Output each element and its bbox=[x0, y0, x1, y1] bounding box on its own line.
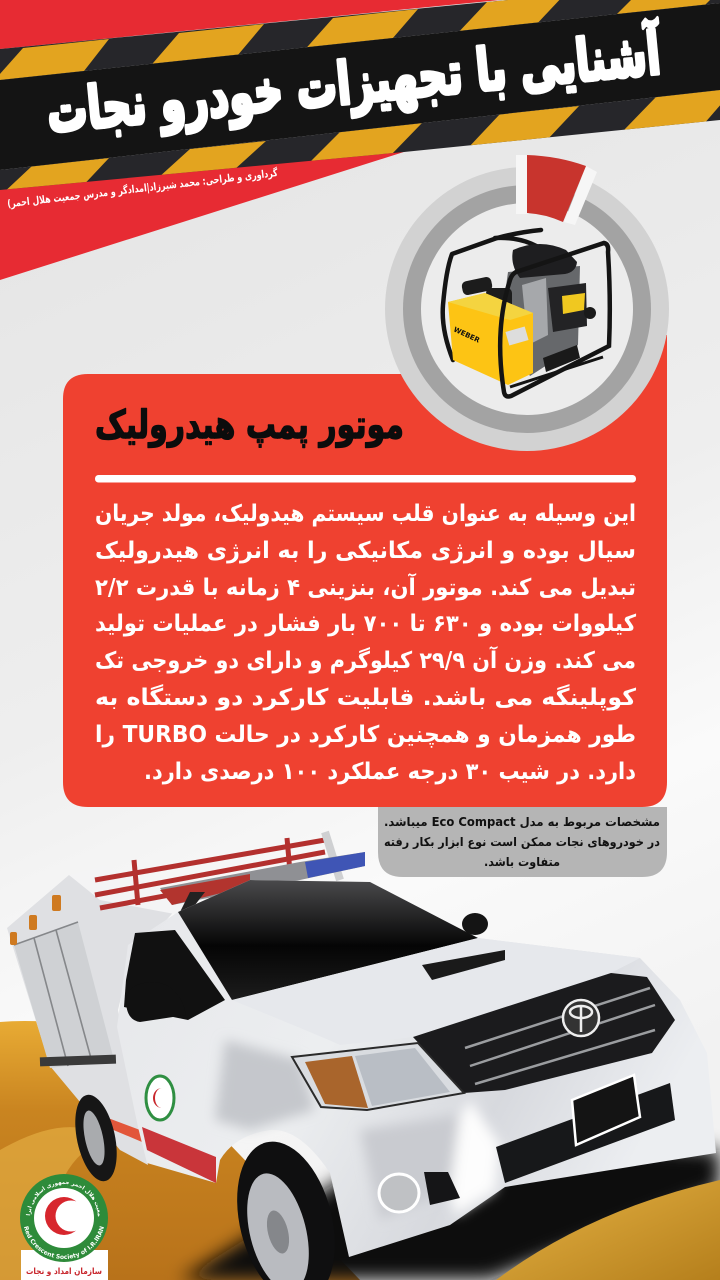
front wheel bbox=[222, 1131, 350, 1280]
logo: Red Crescent rescue organization: جمعیت هلال احمر جمهوری اسلامی ایران bbox=[26, 1182, 100, 1217]
note panel bbox=[378, 807, 667, 877]
cargo box bbox=[7, 866, 190, 1165]
fog lamp bbox=[379, 1172, 460, 1212]
windshield bbox=[178, 880, 478, 1000]
hazard stripe band: lower bbox=[0, 85, 720, 196]
front frame bbox=[500, 243, 610, 396]
black title band bbox=[0, 3, 720, 170]
mirror: passenger side bbox=[462, 913, 488, 935]
hood bbox=[232, 938, 640, 1045]
panel: hydraulic pump description bbox=[63, 335, 667, 807]
body text: کوپلینگه می باشد. قابلیت کارکرد دو دستگاه به bbox=[95, 684, 637, 711]
note panel: در خودروهای نجات ممکن است نوع ابزار بکار رفته bbox=[384, 835, 660, 850]
body text: طور همزمان و همچنین کارکرد در حالت TURBO را bbox=[95, 722, 636, 748]
toyota emblem bbox=[563, 1000, 599, 1036]
back frame bbox=[443, 230, 553, 360]
license plate bbox=[572, 1075, 640, 1145]
icon: hydraulic pump bbox=[443, 230, 610, 396]
engine bbox=[500, 266, 580, 376]
header red shapes bbox=[0, 0, 500, 280]
logo: Red Crescent rescue organization: سازمان امداد و نجات bbox=[26, 1267, 102, 1277]
truck body bbox=[117, 880, 716, 1257]
lower grille bbox=[496, 1083, 675, 1183]
body text: کیلووات بوده و ۶۳۰ تا ۷۰۰ بار فشار در عملیات تولید bbox=[95, 611, 637, 637]
light bar bbox=[160, 852, 365, 912]
desert ground bbox=[0, 1021, 720, 1280]
mirror: driver side bbox=[126, 982, 186, 1022]
truck illustration bbox=[7, 832, 716, 1280]
headlight bbox=[292, 1043, 464, 1110]
ring around pump photo bbox=[385, 155, 669, 451]
side window bbox=[124, 930, 225, 1020]
side stripe bbox=[142, 1127, 216, 1183]
hazard stripe band: upper bbox=[0, 0, 720, 80]
body text: دارد. در شیب ۳۰ درجه عملکرد ۱۰۰ درصدی دارد. bbox=[144, 759, 636, 785]
icon: hydraulic pump: WEBER bbox=[452, 326, 481, 345]
hydraulic cylinders bbox=[461, 276, 493, 296]
credit line: گرداوری و طراحی: محمد شیرزاد|امدادگر و مدرس جمعیت هلال احمر) bbox=[7, 166, 279, 210]
heading: موتور پمپ هیدرولیک bbox=[95, 403, 404, 448]
body text: می کند. وزن آن ۲۹/۹ کیلوگرم و دارای دو خروجی تک bbox=[95, 645, 636, 674]
crescent bbox=[45, 1197, 86, 1235]
note panel: متفاوت باشد. bbox=[484, 855, 560, 870]
body text: این وسیله به عنوان قلب سیستم هیدولیک، مولد جریان bbox=[95, 501, 636, 527]
body text bbox=[95, 501, 637, 785]
body text: تبدیل می کند. موتور آن، بنزینی ۴ زمانه با قدرت ۲/۲ bbox=[95, 572, 636, 601]
grille bbox=[413, 973, 675, 1093]
logo: Red Crescent rescue organization bbox=[20, 1174, 108, 1280]
yellow tank bbox=[448, 293, 533, 385]
fender and bumper shading bbox=[215, 1040, 500, 1220]
body text: سیال بوده و انرژی مکانیکی را به انرژی هیدرولیک bbox=[95, 538, 636, 564]
hood scoop bbox=[422, 950, 505, 980]
door logo bbox=[146, 1076, 174, 1120]
rear wheel bbox=[68, 1091, 124, 1185]
logo: Red Crescent rescue organization: Red Crescent Society of I.R.IRAN bbox=[24, 1226, 104, 1260]
red wedge marker bbox=[527, 155, 586, 222]
roof rack bbox=[95, 832, 340, 908]
note panel: مشخصات مربوط به مدل Eco Compact میباشد. bbox=[384, 815, 660, 830]
